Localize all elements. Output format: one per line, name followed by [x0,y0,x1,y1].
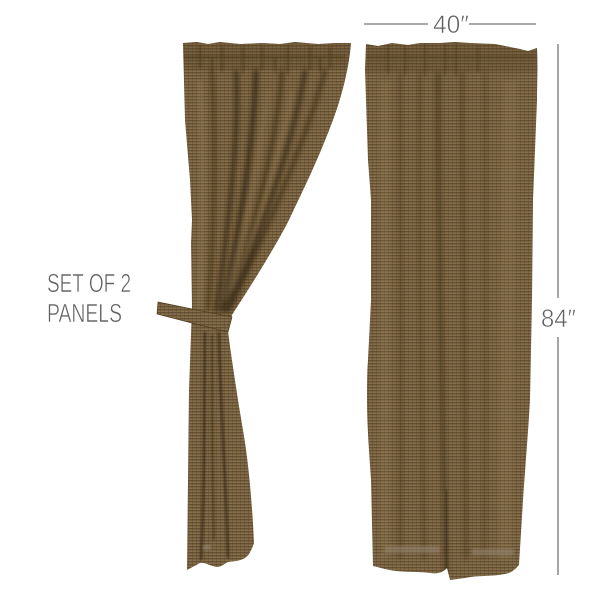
right curtain folds [400,72,485,575]
right curtain centre seam [446,490,447,580]
tieback strap [157,302,232,332]
left curtain header gathers [183,42,351,74]
text: set of 2 panels: SET OF 2 [47,268,131,298]
left curtain panel, tied back [157,35,360,575]
left curtain hem [203,545,211,550]
left curtain folds below tieback [201,332,228,560]
right curtain hem [385,546,514,555]
left curtain folds above tieback [208,70,325,312]
height dimension: 84 inches: 84″ [541,305,576,333]
right curtain header gathers [365,42,538,76]
width dimension: 40 inches: 40″ [433,11,469,39]
text: set of 2 panels [47,268,131,328]
right curtain highlights [385,80,510,560]
right curtain panel, hanging straight [360,38,542,583]
text: set of 2 panels: PANELS [47,298,122,328]
left curtain highlights above tieback [199,80,292,310]
